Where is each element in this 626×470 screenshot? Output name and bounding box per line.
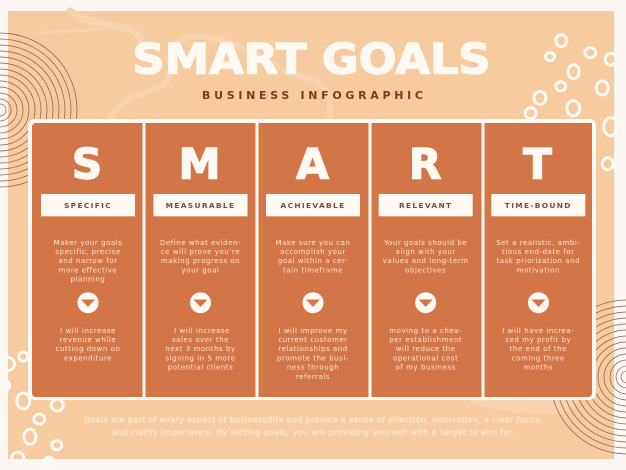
example: relevant: operational cost [393, 354, 458, 362]
description: measurable: ce will prove you’re [161, 248, 240, 256]
column: measurable [146, 123, 256, 397]
example: specific: cutting down on [56, 345, 120, 353]
icon: down arrow [302, 292, 324, 313]
title: SMART GOALS [132, 34, 490, 84]
description: relevant: objectives [405, 266, 446, 274]
example: relevant: moving to a chea- [389, 327, 462, 335]
description: specific: specific, precise [55, 248, 121, 256]
description: time-bound: Set a realistic, ambi- [496, 239, 580, 247]
example: relevant: of my business [396, 364, 456, 372]
white ring blobs: top right [525, 35, 618, 170]
board outline [30, 120, 594, 398]
example: time-bound: coming three [512, 354, 565, 362]
description: time-bound: tious end-date for [502, 248, 575, 256]
example: achievable: relationships and [278, 345, 348, 353]
description: relevant: Your goals should be [383, 239, 467, 247]
icon: down arrow [415, 292, 436, 313]
icon: down arrow [78, 292, 98, 313]
example: measurable: potential clients [168, 364, 233, 372]
white ring blobs: bottom left [0, 352, 63, 469]
example: time-bound: sed my profit by [505, 336, 571, 344]
description: measurable [160, 239, 241, 274]
description: relevant: values and long-term [383, 257, 469, 265]
description: relevant [383, 239, 469, 274]
description: achievable: goal within a cer- [278, 257, 348, 265]
example: achievable: promote the busi- [277, 354, 349, 362]
description: relevant: align with your [396, 248, 456, 256]
example: measurable: I will increase [174, 327, 230, 335]
description: time-bound: task priorization and [496, 257, 580, 265]
label: measurable [154, 194, 248, 216]
description: measurable: Define what eviden- [160, 239, 241, 247]
column: time-bound [484, 123, 592, 397]
example: time-bound [502, 327, 574, 372]
description: achievable: tain timeframe [283, 266, 343, 274]
example: measurable: sales over the [172, 336, 229, 344]
example: specific: revenue while [60, 336, 116, 344]
description: achievable: Make sure you can [275, 239, 351, 247]
description: specific: and narrow for [58, 257, 118, 265]
description: specific: more effective [59, 266, 117, 274]
description: specific: Maker your goals [54, 239, 122, 247]
description: measurable: making progress on [161, 257, 240, 265]
label: achievable: ACHIEVABLE [281, 201, 345, 210]
example: relevant: per establishment [389, 336, 462, 344]
description: achievable [275, 239, 351, 274]
example: relevant [389, 327, 462, 372]
subtitle: BUSINESS INFOGRAPHIC [202, 89, 423, 102]
letter M: M [179, 140, 220, 188]
example: time-bound: months [523, 364, 553, 372]
description: time-bound: motivation [517, 266, 560, 274]
label: time-bound [491, 194, 585, 216]
example: specific [56, 327, 120, 362]
label: specific [41, 194, 135, 216]
label: time-bound: TIME-BOUND [505, 201, 572, 210]
footer text: Goals are part of every aspect of business/life and provide a sense of direction, motivation, a clear focus, [84, 416, 542, 424]
label: relevant: RELEVANT [399, 201, 452, 210]
icon: down arrow [528, 292, 549, 313]
letter R: R [409, 140, 441, 188]
column: achievable [258, 123, 368, 397]
example: achievable [277, 327, 349, 381]
example: achievable: referrals [296, 373, 330, 381]
letter T: T [523, 140, 552, 188]
label: measurable: MEASURABLE [166, 201, 235, 210]
label: achievable [266, 194, 360, 216]
label: specific: SPECIFIC [64, 201, 112, 210]
label: relevant [379, 194, 473, 216]
example: achievable: current customer [278, 336, 348, 344]
example: specific: expenditure [64, 354, 112, 362]
description: specific: planning [71, 276, 105, 284]
letter S: S [72, 140, 102, 188]
footer text [84, 416, 542, 437]
description: achievable: accomplish your [280, 248, 346, 256]
example: relevant: will reduce the [396, 345, 456, 353]
concentric rings: left [0, 33, 77, 187]
decorative light swooshes [40, 11, 580, 414]
description: measurable: your goal [182, 266, 219, 274]
example: time-bound: the end of the [510, 345, 567, 353]
example: measurable [165, 327, 236, 372]
letter A: A [296, 140, 329, 188]
footer text: and clarify importance. By setting goals, you are providing yourself with a target to aim for. [112, 428, 514, 437]
column: relevant [372, 123, 482, 397]
example: time-bound: I will have increa- [502, 327, 574, 335]
column: specific [32, 123, 142, 397]
concentric rings: right [550, 300, 626, 454]
example: measurable: next 3 months by [165, 345, 236, 353]
icon: down arrow [190, 292, 211, 313]
description: time-bound [496, 239, 580, 274]
example: measurable: signing in 5 more [165, 354, 236, 362]
example: achievable: ness through [287, 364, 339, 372]
example: achievable: I will improve my [278, 327, 348, 335]
example: specific: I will increase [60, 327, 116, 335]
description: specific [54, 239, 122, 284]
